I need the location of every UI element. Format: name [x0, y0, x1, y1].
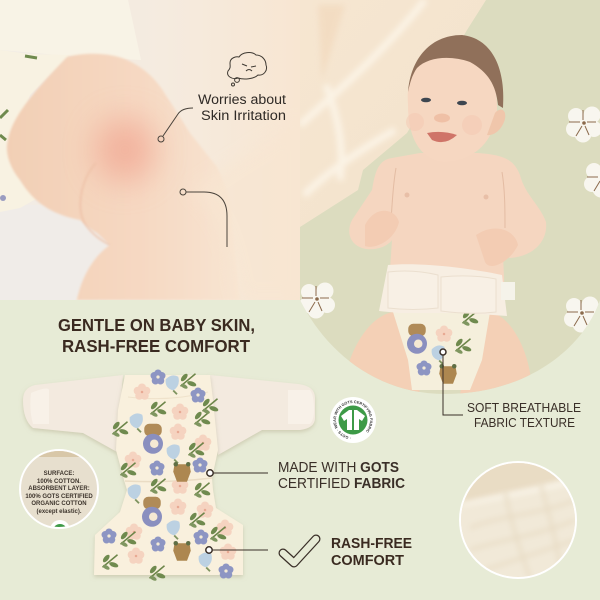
baby hands: [365, 211, 518, 266]
diaper wings: [23, 375, 315, 455]
callout line: rash-free comfort: [206, 547, 268, 553]
callout: soft breathable fabric texture: SOFT BREATHABLE: [467, 400, 581, 415]
callout: soft breathable fabric texture: FABRIC TEXTURE: [474, 415, 575, 430]
callout line: GOTS certified fabric: [207, 470, 268, 476]
composition text: 100% COTTON.: [37, 479, 81, 485]
inset: fabric composition: [20, 450, 98, 540]
composition text: (except elastic).: [36, 509, 82, 515]
title: GENTLE ON BABY SKIN,: [58, 315, 255, 335]
text: made with GOTS certified fabric: [278, 460, 405, 492]
text: rash-free comfort: [331, 536, 412, 569]
baby head: [406, 35, 505, 162]
waist belt: [379, 264, 515, 316]
callout: worries about skin irritation: [198, 92, 286, 123]
badge: GOTS: · GOTS · WEAR WITH GOTS CERTIFYING FABRIC: [333, 400, 373, 439]
composition text: 100% GOTS CERTIFIED: [25, 494, 93, 500]
baby body: [343, 153, 546, 394]
inset: fabric texture close-up: [460, 460, 580, 578]
text: rash-free comfort: RASH-FREE: [331, 536, 412, 552]
diaper on baby: [393, 310, 490, 390]
diaper print: [102, 370, 236, 582]
composition text: SURFACE:: [44, 471, 74, 477]
composition text: ABSORBENT LAYER:: [28, 486, 90, 492]
composition text: ORGANIC COTTON: [31, 501, 87, 507]
panel: skin irritation photo: [0, 0, 300, 300]
text: made with GOTS certified fabric: CERTIFIED FABRIC: [278, 476, 405, 492]
callout line: skin irritation marker: [158, 108, 227, 247]
text: rash-free comfort: COMFORT: [331, 553, 404, 569]
panel: smiling baby photo: [299, 0, 600, 400]
callout: soft breathable fabric texture: [467, 400, 581, 430]
title: [58, 315, 255, 356]
title: RASH-FREE COMFORT: [62, 336, 250, 356]
icon: worried thought cloud: [228, 53, 267, 86]
composition text: [25, 471, 93, 515]
diaper body: [94, 375, 243, 575]
cotton bolls: [299, 106, 600, 332]
callout line: fabric texture: [440, 349, 463, 415]
callout: worries about skin irritation: Worries about: [198, 92, 286, 107]
text: made with GOTS certified fabric: MADE WITH GOTS: [278, 460, 399, 476]
blanket: [300, 0, 486, 227]
diaper product: [23, 370, 315, 582]
callout: worries about skin irritation: Skin Irritation: [201, 108, 286, 123]
icon: check mark: [283, 539, 316, 563]
